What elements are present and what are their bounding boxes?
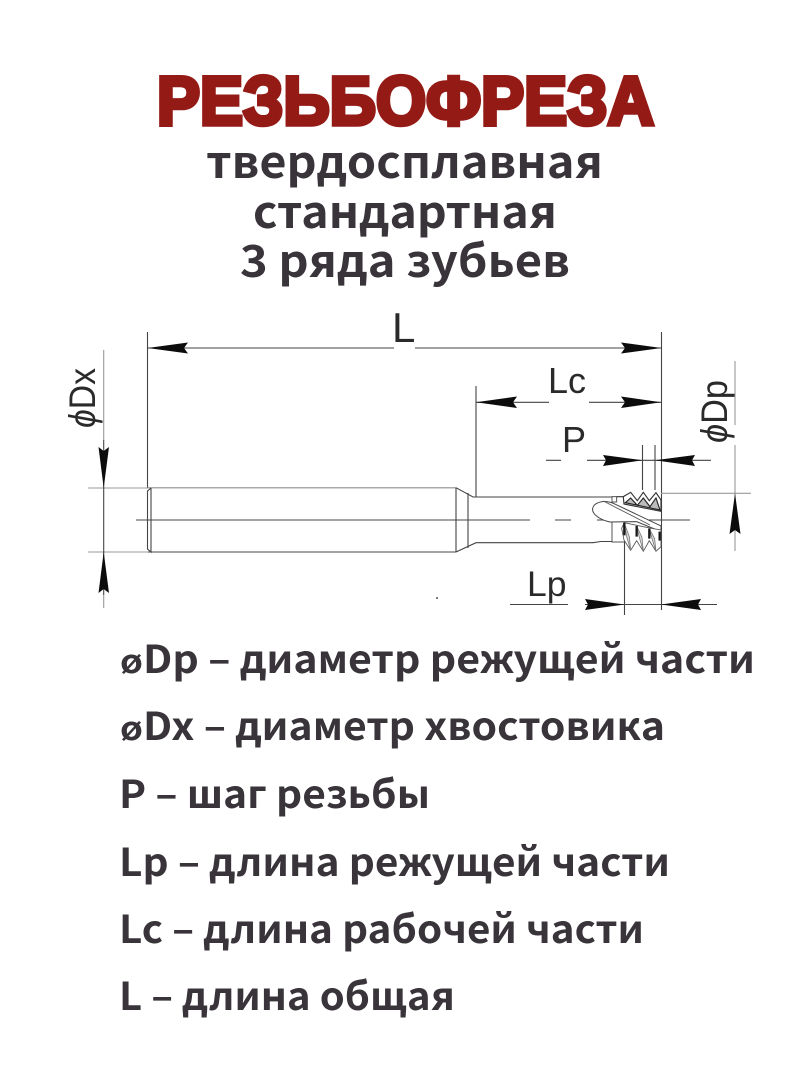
dimension Lp: Lp <box>527 564 566 604</box>
subtitle: твердосплавная <box>206 126 603 191</box>
legend: P: P – шаг резьбы <box>119 764 430 820</box>
dimension Lc <box>476 360 661 497</box>
tool shank and neck <box>136 488 690 552</box>
dimension L: L <box>392 304 415 351</box>
subtitle <box>206 126 603 290</box>
dimension Dx: ϕDx <box>62 368 103 428</box>
dimension Lc: Lc <box>548 360 586 401</box>
dimension P <box>546 419 711 490</box>
dimension L <box>148 304 662 610</box>
legend: Dp: Dp – диаметр режущей части <box>143 629 755 685</box>
dimension P: P <box>562 419 586 460</box>
upper teeth <box>617 492 661 511</box>
dimension Lp <box>510 530 717 615</box>
subtitle: 3 ряда зубьев <box>240 225 570 290</box>
small speck <box>436 597 438 599</box>
legend: L: L – длина общая <box>119 966 455 1022</box>
flute <box>593 502 661 532</box>
subtitle: стандартная <box>253 176 557 241</box>
dimension Dp <box>661 361 751 551</box>
dimension Dp: ϕDp <box>694 380 735 443</box>
legend: Dx: Dx – диаметр хвостовика <box>143 696 665 752</box>
legend: Dp: ø <box>120 637 143 683</box>
dimension Dx <box>62 350 148 608</box>
cutting head with teeth <box>593 492 661 551</box>
technical drawing of thread mill <box>62 304 751 615</box>
title: РЕЗЬБОФРЕЗА <box>157 63 654 140</box>
legend list <box>119 629 755 1022</box>
legend: Lp: Lp – длина режущей части <box>119 832 670 888</box>
lower teeth <box>622 523 661 551</box>
legend: Dx: ø <box>120 704 143 750</box>
legend: Lc: Lc – длина рабочей части <box>119 899 644 955</box>
